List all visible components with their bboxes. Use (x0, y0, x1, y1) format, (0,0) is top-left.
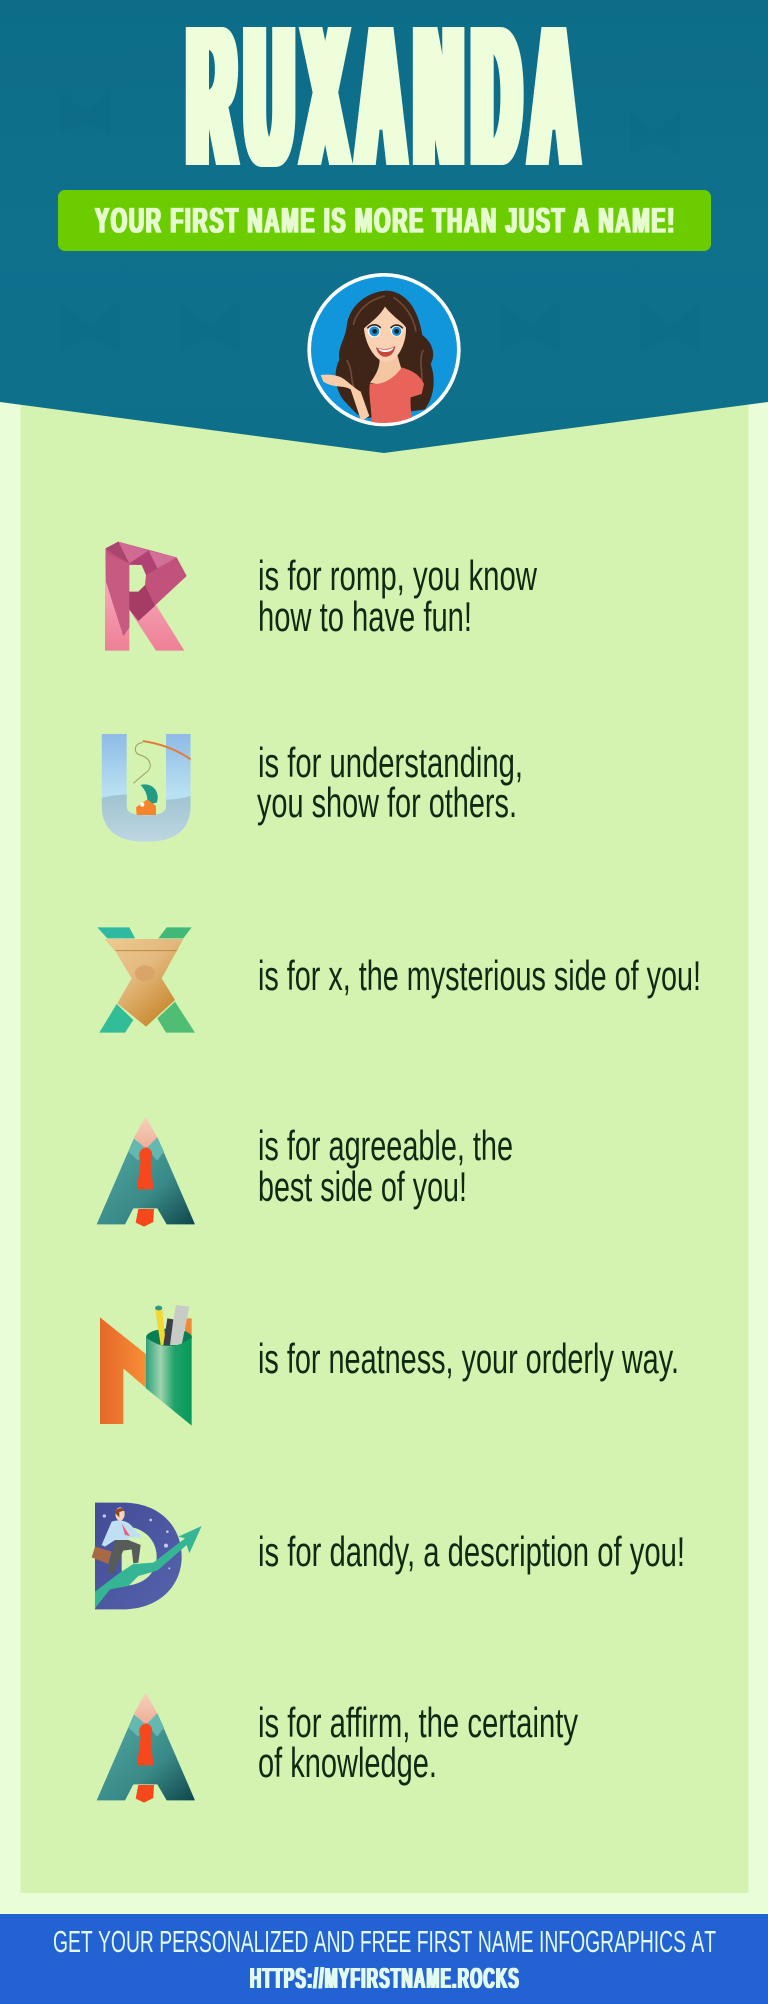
text: A: of knowledge. (258, 1739, 437, 1786)
icon: letter D (92, 1503, 202, 1609)
top (369, 367, 424, 424)
text: A: best side of you! (258, 1163, 467, 1210)
letter A row 2 (97, 1693, 578, 1803)
letter R row (105, 542, 537, 651)
letter X row (97, 927, 701, 1033)
icon: letter N (100, 1305, 192, 1426)
smile (376, 346, 395, 357)
neck and chest (370, 355, 402, 384)
letter D row (92, 1503, 685, 1609)
text: A (258, 1122, 513, 1210)
subtitle bar (58, 190, 711, 251)
eyes (368, 325, 380, 337)
icon: letter X (97, 927, 195, 1033)
header banner (0, 0, 768, 453)
text: A: is for affirm, the certainty (258, 1699, 578, 1746)
footer url: HTTPS://MYFIRSTNAME.ROCKS (250, 1963, 520, 1995)
text: R: how to have fun! (258, 593, 472, 640)
icon: letter R (105, 542, 187, 651)
text: A: is for agreeable, the (258, 1122, 513, 1169)
hair (336, 291, 434, 418)
footer (0, 1914, 768, 2004)
text: R (258, 552, 537, 640)
face (364, 307, 406, 362)
arm (321, 375, 369, 421)
icon: letter A (97, 1117, 195, 1227)
icon: letter A (97, 1693, 195, 1803)
text: U (257, 739, 523, 826)
text: A (258, 1699, 578, 1786)
letter A row (97, 1117, 513, 1227)
avatar portrait (307, 273, 461, 426)
letter N row (100, 1305, 679, 1426)
letter U row (100, 733, 523, 843)
hair highlights (347, 296, 423, 397)
content panel (20, 380, 748, 1893)
text: R: is for romp, you know (258, 552, 537, 599)
text: U: you show for others. (257, 779, 517, 826)
text: U: is for understanding, (258, 739, 523, 786)
icon: letter U (100, 733, 193, 843)
